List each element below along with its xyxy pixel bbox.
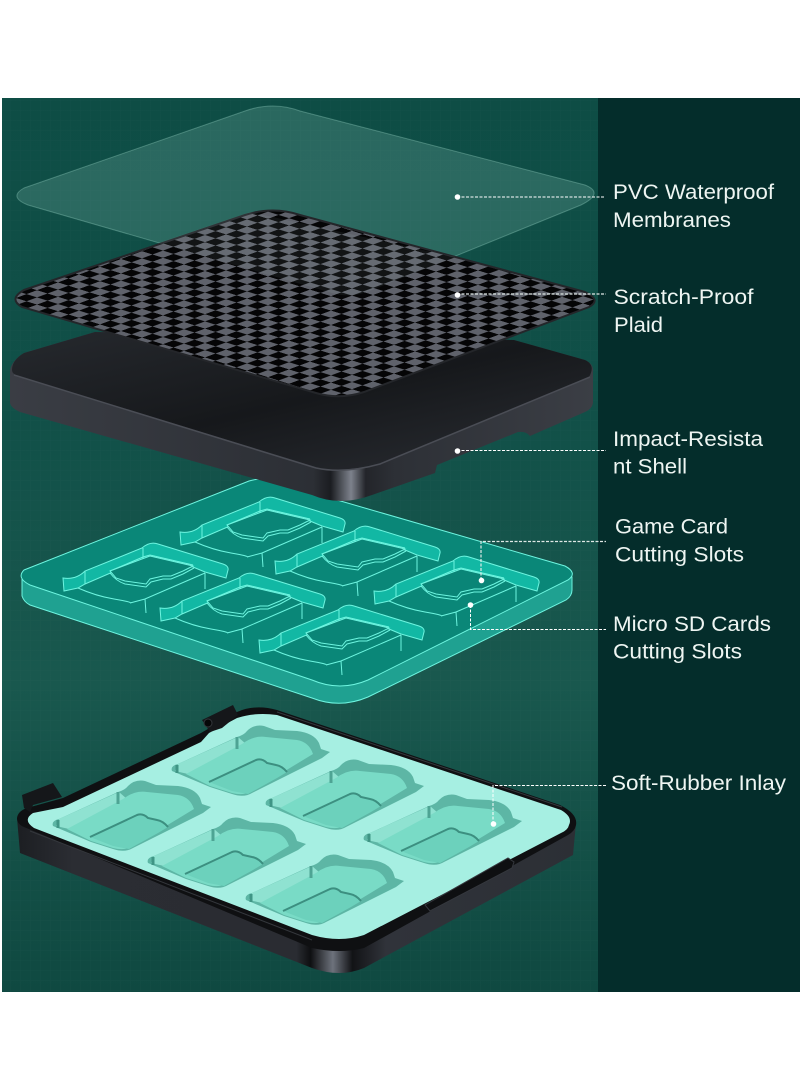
slot: front row 2 [160, 573, 325, 643]
pocket: back row 1 [172, 726, 330, 796]
layer: soft-rubber inlay base [17, 705, 576, 973]
pocket: back row 3 [364, 795, 522, 865]
label: Game Card Cutting Slots [615, 516, 744, 566]
leader: plaid [455, 292, 606, 298]
leader: shell [455, 448, 606, 454]
label: Impact-Resistant Shell: Impact-Resista [613, 428, 763, 451]
label: Impact-Resistant Shell [613, 428, 763, 478]
label: Game Card Cutting Slots: Cutting Slots [615, 544, 744, 566]
slot: back row 1 [180, 497, 345, 567]
label: Micro SD Cards Cutting Slots: Cutting Slots [613, 640, 742, 664]
layer: impact-resistant shell [10, 332, 593, 501]
layer: scratch-proof plaid [15, 210, 595, 396]
label: Scratch-Proof Plaid: Plaid [614, 314, 663, 337]
shell edge highlight [14, 375, 590, 470]
slot: front row 1 [63, 543, 228, 613]
slot: back row 2 [275, 526, 440, 596]
mint inlay [28, 714, 570, 939]
label: Impact-Resistant Shell: nt Shell [613, 456, 687, 478]
layer: PVC waterproof membrane [17, 106, 594, 295]
leader: PVC membrane [455, 194, 604, 200]
label: PVC Waterproof Membranes: PVC Waterproof [613, 181, 774, 204]
label: Micro SD Cards Cutting Slots: Micro SD Cards [613, 613, 771, 636]
hinge right [202, 705, 238, 732]
base rim [17, 707, 576, 951]
tray side face [22, 577, 572, 703]
slot: front row 3 [259, 605, 424, 675]
base side wall [17, 818, 576, 973]
leader: soft rubber inlay [491, 786, 607, 827]
hinge hole [204, 719, 212, 727]
latch [425, 858, 514, 911]
rim highlight [30, 712, 562, 940]
label: Scratch-Proof Plaid [614, 286, 754, 337]
label: Scratch-Proof Plaid: Scratch-Proof [614, 286, 754, 309]
pocket: back row 2 [266, 760, 424, 830]
right label column [598, 98, 800, 992]
pocket: front row 3 [246, 855, 404, 925]
pocket: front row 1 [53, 781, 211, 851]
background panel [2, 98, 598, 992]
plaid membrane reflection [158, 212, 455, 295]
label: Game Card Cutting Slots: Game Card [615, 516, 728, 538]
label: PVC Waterproof Membranes: Membranes [613, 209, 731, 232]
label: Micro SD Cards Cutting Slots [613, 613, 771, 664]
shell top [12, 332, 592, 470]
leader: game card slots [479, 542, 606, 583]
label: PVC Waterproof Membranes [613, 181, 774, 232]
shell side [10, 332, 593, 501]
layer: translucent card-slot tray [21, 479, 572, 703]
leader: micro SD slots [468, 602, 606, 630]
label: Soft-Rubber Inlay: Soft-Rubber Inlay [611, 772, 787, 795]
pocket: front row 2 [148, 818, 306, 888]
slot: back row 3 [374, 556, 539, 626]
tray top face [21, 479, 572, 686]
hinge left [22, 783, 62, 812]
